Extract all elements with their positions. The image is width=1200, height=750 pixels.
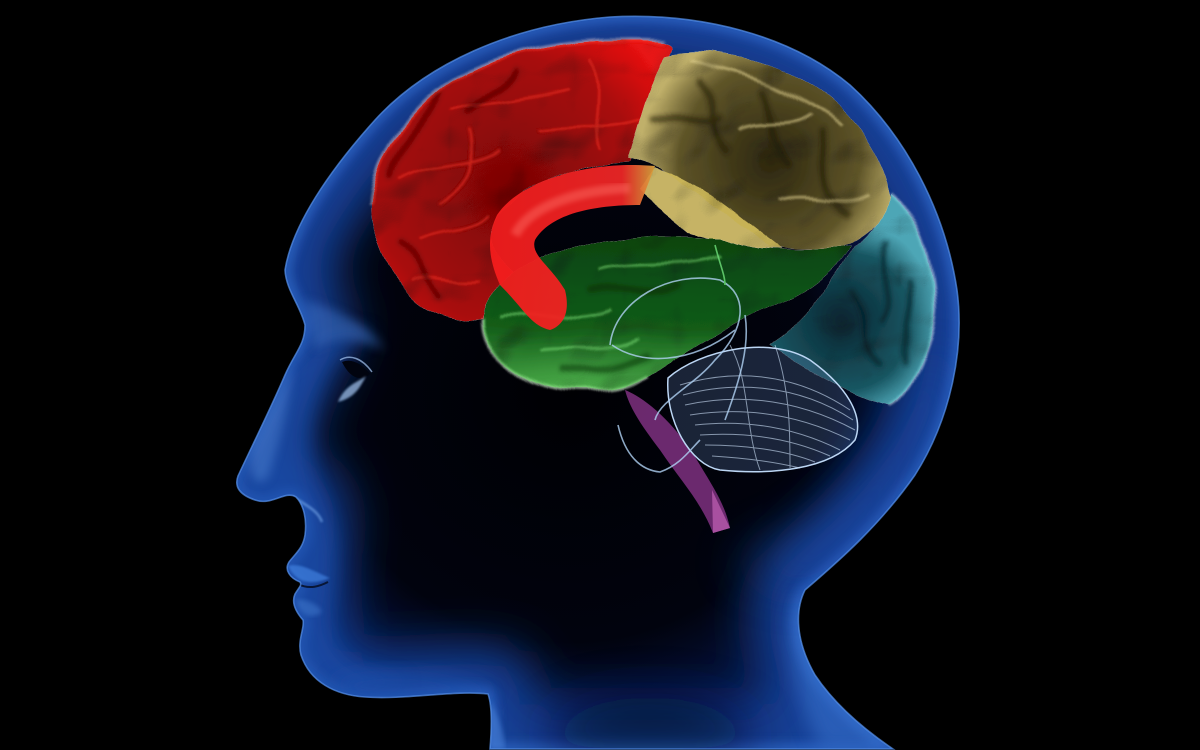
- cingulate band: bright red arc: [490, 165, 655, 330]
- outer glow of skull and face: [237, 16, 959, 749]
- brain stem: magenta: [625, 390, 730, 533]
- limbic outline: translucent loop: [610, 245, 746, 472]
- illustration: transparent human head with coloured brain: [236, 16, 960, 750]
- neck centre shade: [545, 697, 755, 749]
- neck: [491, 705, 506, 748]
- jaw and rear skull glow: [367, 665, 464, 688]
- face highlights: [230, 300, 955, 749]
- parietal lobe: yellow: [628, 51, 892, 250]
- brain: [372, 40, 935, 533]
- frontal lobe: red: [372, 40, 673, 322]
- cerebellum: translucent striated: [668, 345, 858, 472]
- occipital lobe: teal: [770, 195, 935, 405]
- head edge line: [237, 16, 959, 749]
- head silhouette: [236, 16, 960, 749]
- temporal lobe: green: [482, 236, 852, 390]
